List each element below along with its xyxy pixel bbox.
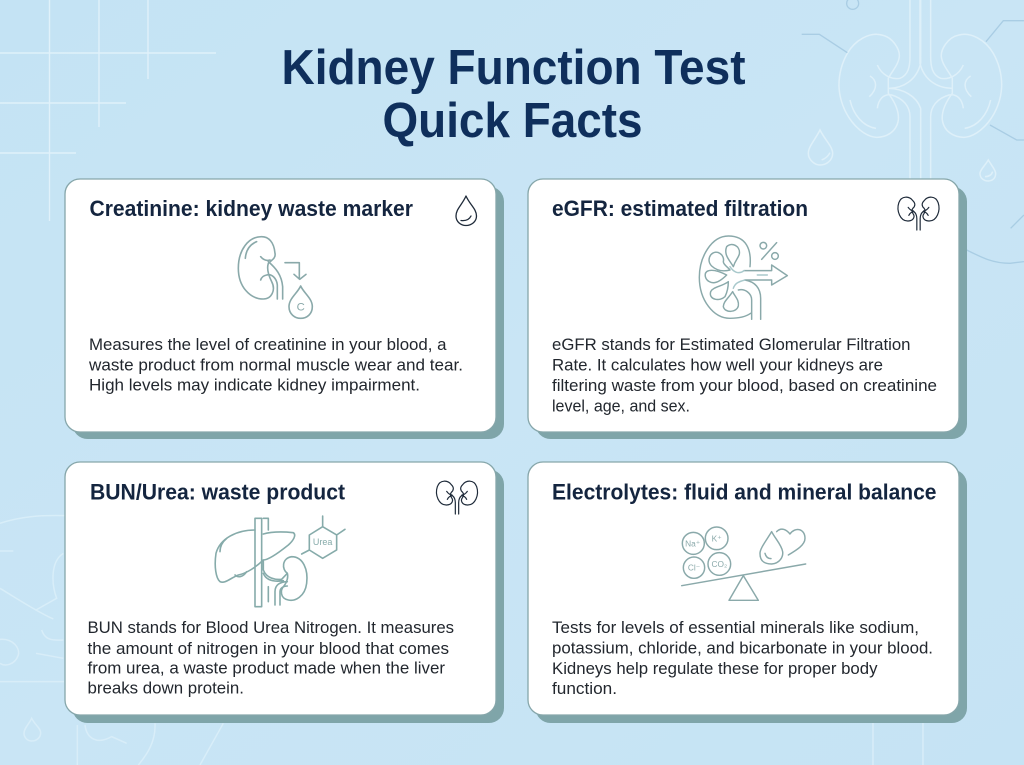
icon: pair of kidneys xyxy=(898,197,939,230)
body text: electrolytes: potassium, chloride, and bicarbonate in your blood. xyxy=(552,638,933,658)
body text: electrolytes xyxy=(552,618,933,698)
body text: electrolytes: function. xyxy=(552,679,617,698)
body text: BUN/Urea: BUN stands for Blood Urea Nitrogen. It measures xyxy=(88,618,454,637)
panel: BUN/Urea xyxy=(65,462,504,723)
body text: BUN/Urea: the amount of nitrogen in your blood that comes xyxy=(88,639,449,658)
title: Quick Facts xyxy=(382,94,642,148)
title xyxy=(282,41,746,148)
body text: eGFR: level, age, and sex. xyxy=(552,396,690,416)
body text: electrolytes: Tests for levels of essential minerals like sodium, xyxy=(552,618,919,637)
body text: BUN/Urea xyxy=(88,618,454,698)
icon: electrolyte balance scale: CO₂ xyxy=(711,559,727,569)
card shadow xyxy=(536,470,967,723)
body text: creatinine: waste product from normal muscle wear and tear. xyxy=(88,356,463,374)
icon: kidney to creatinine drop xyxy=(238,237,312,318)
heading: BUN/Urea: BUN/Urea: waste product xyxy=(90,480,345,504)
card body xyxy=(528,179,959,432)
heading: eGFR: eGFR: estimated filtration xyxy=(552,196,808,221)
body text: eGFR: Rate. It calculates how well your kidneys are xyxy=(552,356,883,374)
body text: creatinine: Measures the level of creatinine in your blood, a xyxy=(89,335,447,354)
icon: liver, kidney and urea molecule xyxy=(215,516,345,607)
card shadow xyxy=(72,470,504,723)
icon: kidney to creatinine drop: C xyxy=(297,302,305,314)
panel: electrolytes xyxy=(528,462,967,723)
body text: eGFR: eGFR stands for Estimated Glomerular Filtration xyxy=(552,335,910,354)
icon: electrolyte balance scale: Na⁺ xyxy=(685,538,700,548)
body text: creatinine xyxy=(88,335,463,394)
heading: creatinine: Creatinine: kidney waste marker xyxy=(90,196,413,221)
background bottom-right lines xyxy=(873,723,923,765)
icon: pair of kidneys xyxy=(437,481,477,514)
card shadow xyxy=(536,186,967,439)
icon: kidney filtration arrow xyxy=(699,236,787,319)
background blue connector lines xyxy=(802,0,1024,263)
body text: creatinine: High levels may indicate kidney impairment. xyxy=(89,376,420,394)
body text: eGFR xyxy=(552,335,937,416)
icon: electrolyte balance scale: Cl⁻ xyxy=(688,563,700,573)
body text: electrolytes: Kidneys help regulate these for proper body xyxy=(552,659,878,678)
icon: electrolyte balance scale: K⁺ xyxy=(712,533,722,543)
body text: BUN/Urea: breaks down protein. xyxy=(88,678,244,698)
card body xyxy=(528,462,959,715)
background kidney illustration xyxy=(808,0,1002,181)
icon: liver, kidney and urea molecule: Urea xyxy=(313,537,332,547)
heading: electrolytes: Electrolytes: fluid and mineral balance xyxy=(552,480,936,504)
card shadow xyxy=(72,186,504,439)
panel: creatinine xyxy=(65,179,504,439)
body text: eGFR: filtering waste from your blood, based on creatinine xyxy=(552,376,937,395)
panel: eGFR xyxy=(528,179,967,439)
card body xyxy=(65,462,496,715)
card body xyxy=(65,179,496,432)
background grid lines xyxy=(0,0,216,221)
icon: water drop xyxy=(456,196,476,226)
background bottom-left outlines xyxy=(0,516,223,765)
title: Kidney Function Test xyxy=(282,41,746,95)
icon: electrolyte balance scale xyxy=(682,527,806,600)
body text: BUN/Urea: from urea, a waste product made when the liver xyxy=(88,658,445,678)
